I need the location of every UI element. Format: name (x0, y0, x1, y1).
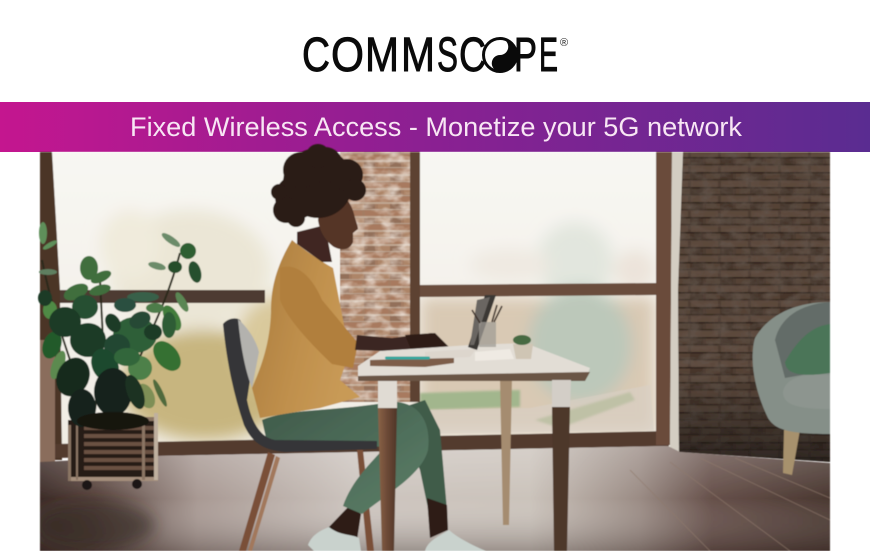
banner title: Fixed Wireless Access - Monetize your 5G network (130, 112, 742, 142)
pillow (785, 324, 830, 375)
chair legs (239, 450, 374, 551)
wheels (82, 480, 92, 490)
shirt (252, 240, 360, 418)
plant stems (42, 253, 180, 415)
right front leg (552, 380, 571, 551)
logo wordmark: C (459, 29, 486, 82)
leaves: back, mid green (39, 222, 204, 411)
banner (0, 102, 870, 152)
photo: woman working on laptop by window (35, 144, 830, 551)
central brick pillar (340, 152, 410, 402)
notebook (370, 358, 454, 367)
table edge (358, 372, 590, 381)
left brick sliver (40, 340, 55, 462)
far leg (395, 400, 447, 518)
logo wordmark: E (539, 29, 558, 82)
right post (656, 152, 672, 445)
logo wordmark: O (331, 29, 364, 82)
shirt sleeve (280, 267, 358, 368)
neck (297, 225, 332, 262)
registered mark: ® (560, 37, 568, 49)
logo wordmark: O (488, 29, 512, 82)
chair shell (753, 302, 830, 434)
papers (475, 349, 514, 361)
logo yin-yang O (484, 38, 516, 72)
logo wordmark: M (401, 29, 435, 82)
floor plank lines (630, 458, 830, 551)
central post (410, 152, 420, 402)
hair (271, 144, 366, 227)
chair leg (783, 430, 800, 475)
armchair (753, 302, 830, 475)
shoes (308, 527, 361, 551)
chair back inner cushion (238, 319, 259, 388)
left window frame (40, 152, 62, 460)
logo wordmark: S (437, 29, 458, 82)
left front leg (378, 381, 397, 551)
logo wordmark: M (365, 29, 399, 82)
trousers (262, 402, 429, 514)
leaves: front, dark (38, 290, 162, 430)
window glass and blurred outdoors (40, 152, 680, 452)
floor shadow under plant (35, 501, 155, 549)
ankle (328, 505, 361, 540)
hand (405, 333, 450, 353)
pencil cup (472, 305, 502, 347)
room background (35, 152, 830, 551)
face (318, 191, 358, 249)
desk (358, 295, 590, 551)
crate (68, 413, 158, 481)
laptop screen (468, 295, 496, 350)
right horizontal mullion (420, 283, 656, 297)
dark brick wall (678, 152, 830, 463)
left horizontal mullion (60, 290, 265, 303)
logo wordmark: P (514, 29, 537, 82)
floor (40, 446, 830, 551)
logo: CommScope (302, 29, 568, 82)
succulent pot (513, 335, 533, 359)
table top (358, 343, 590, 381)
plant in wooden crate (38, 222, 204, 490)
woman and chair (223, 144, 486, 551)
cushion (783, 374, 830, 409)
bottom sill (55, 431, 669, 458)
laptop base (425, 349, 476, 359)
logo wordmark: C (302, 29, 330, 82)
back leg (500, 378, 512, 525)
forearms (355, 333, 438, 352)
plaster edge (670, 152, 683, 452)
chair shell (223, 318, 377, 452)
teal pen (385, 356, 430, 360)
